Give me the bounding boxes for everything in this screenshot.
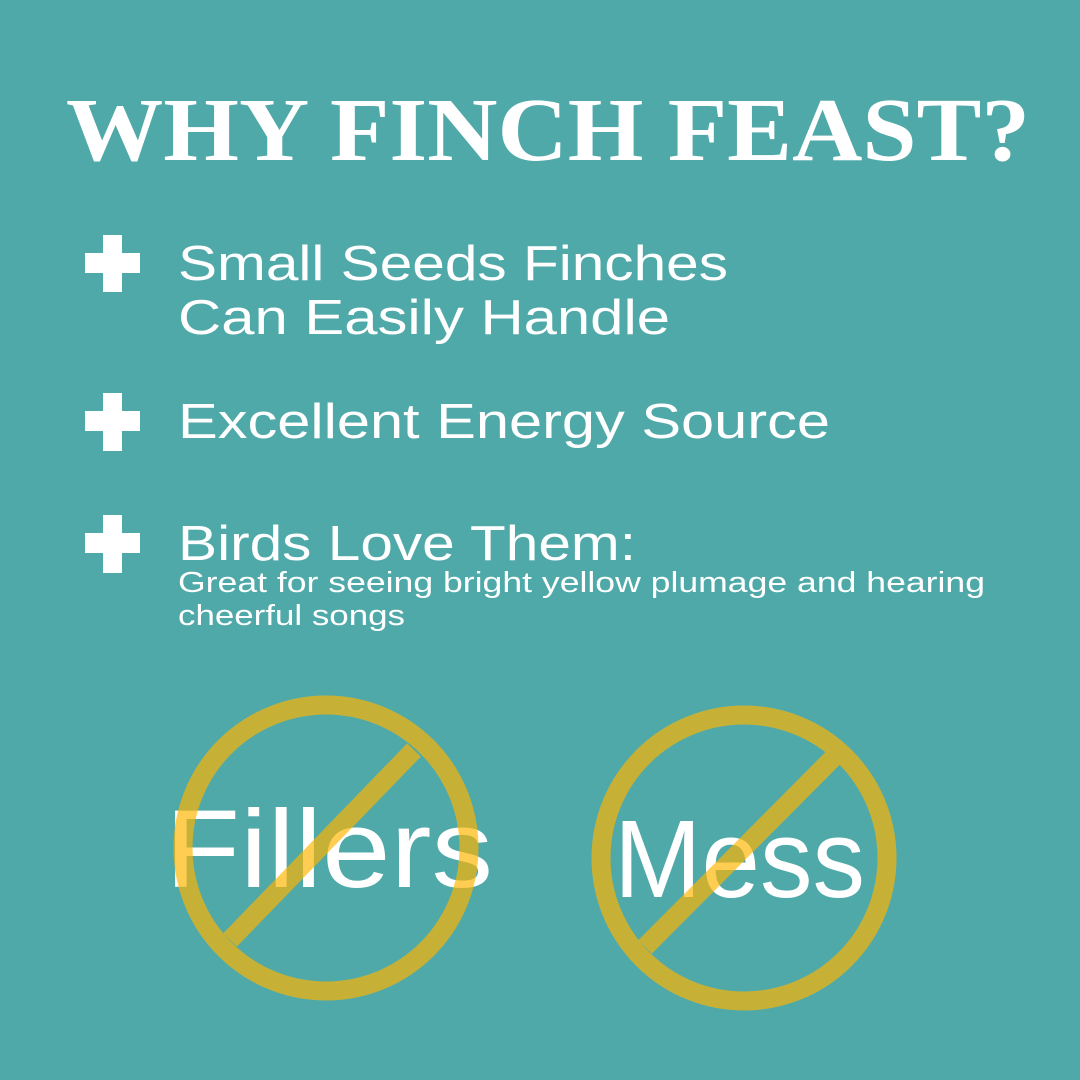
title: WHY FINCH FEAST? [66,81,1030,180]
text block: birds love them: Birds Love Them: [178,517,636,571]
text block: birds love them: Great for seeing bright yellow plumage and hearing [178,567,985,599]
text block: birds love them [178,517,985,632]
icon: no fillers [165,705,493,991]
icon: no mess: Mess [614,798,865,921]
text block: birds love them: cheerful songs [178,600,405,632]
icon: plus 1 [85,235,140,292]
icon: no fillers: Fillers [165,788,493,911]
text block: energy: Excellent Energy Source [178,395,830,449]
text block: small seeds: Small Seeds Finches [178,237,728,291]
text block: small seeds [178,237,728,345]
text block: small seeds: Can Easily Handle [178,291,670,345]
icon: plus 2 [85,393,140,451]
icon: no mess [601,715,887,1001]
icon: plus 3 [85,515,140,573]
